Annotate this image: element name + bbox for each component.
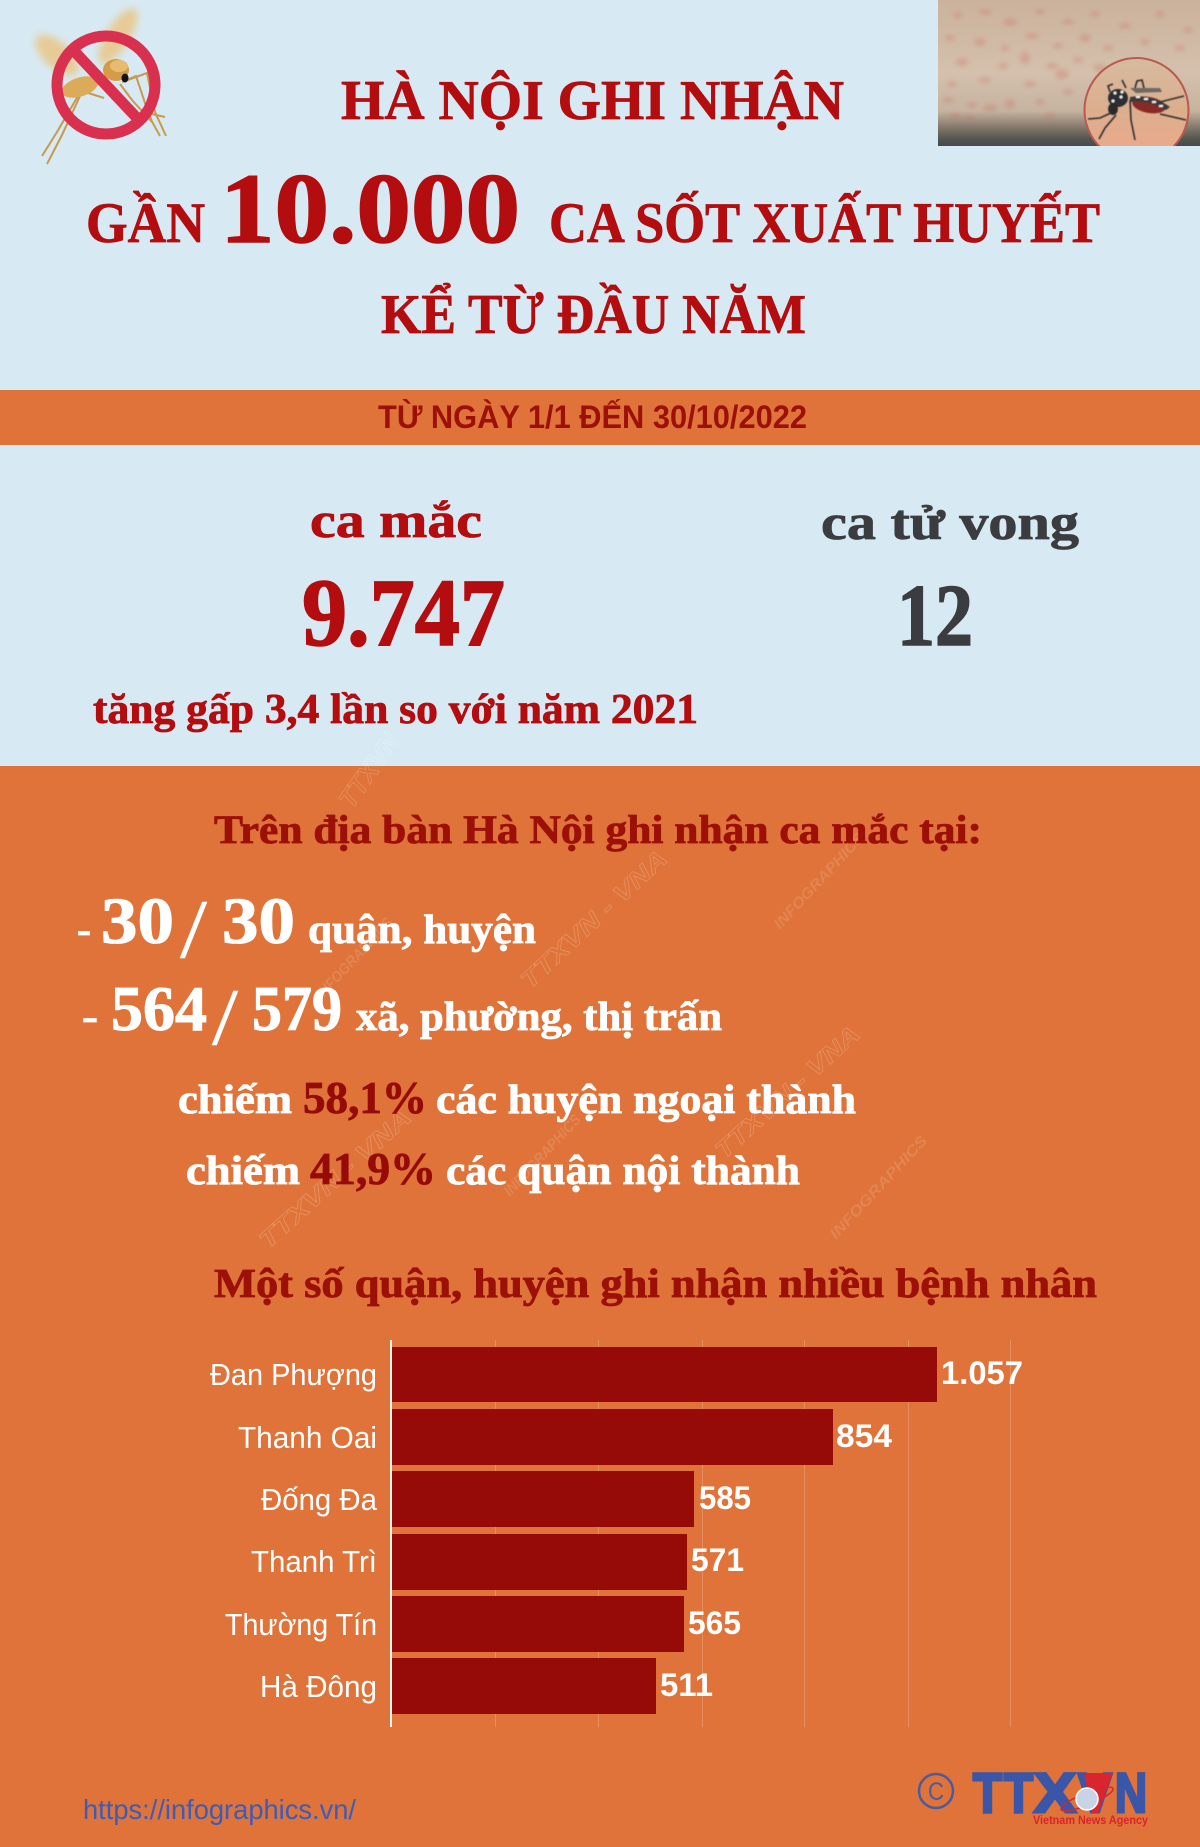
title line 3: KỂ TỪ ĐẦU NĂM [381, 282, 806, 346]
bar: Thanh Trì [251, 1534, 744, 1590]
stat line: communes: - [82, 994, 98, 1039]
logo: TTXVN: V [1078, 1761, 1112, 1824]
increase note: tăng gấp 3,4 lần so với năm 2021 [93, 687, 698, 733]
panel: orange lower section [0, 766, 1200, 1847]
stat line: suburban share: các huyện ngoại thành [436, 1076, 856, 1122]
stat line: communes: / [212, 972, 239, 1062]
bar: Hà Đông [260, 1658, 713, 1714]
stat line: districts [77, 883, 536, 976]
bar: Đống Đa: Đống Đa [261, 1482, 378, 1517]
stat line: districts: 30 [101, 885, 174, 958]
bar: Thanh Oai: 854 [836, 1418, 892, 1454]
stat line: communes: 579 [252, 974, 342, 1044]
logo: TTXVN: N [1115, 1761, 1147, 1824]
title line 2: GẦN: GẦN [86, 191, 205, 255]
stat line: urban share: 41,9% [310, 1143, 436, 1194]
watermarks: TTXVN [332, 725, 406, 813]
stat line: districts: quận, huyện [308, 906, 536, 952]
bar: Đống Đa [261, 1471, 751, 1527]
bar: Đan Phượng: Đan Phượng [210, 1357, 377, 1392]
watermarks: TTXVN - VNA [516, 845, 673, 994]
logo: TTXVN: C [928, 1778, 944, 1806]
stat line: suburban share [178, 1072, 856, 1123]
bar: Đan Phượng [210, 1347, 1023, 1402]
bar chart: districts with most patients [210, 1340, 1023, 1727]
stat value: cases: 9.747 [302, 559, 505, 666]
logo: TTXVN [919, 1761, 1149, 1827]
panel: headline statistics [93, 492, 1079, 733]
date band [0, 390, 1200, 445]
stat line: communes: 564 [111, 974, 207, 1044]
stat line: suburban share: chiếm [178, 1076, 292, 1122]
bar: Hà Đông: 511 [660, 1667, 713, 1703]
stat line: districts: - [77, 907, 91, 952]
bar: Thường Tín: 565 [688, 1605, 741, 1641]
title line 2: CA SỐT XUẤT HUYẾT: CA SỐT XUẤT HUYẾT [549, 191, 1100, 255]
bar: Thanh Oai [238, 1409, 892, 1465]
watermarks: INFOGRAPHICS [312, 914, 397, 1003]
stat line: communes: xã, phường, thị trấn [356, 993, 722, 1039]
logo: TTXVN: T [973, 1761, 1002, 1824]
title line 1: HÀ NỘI GHI NHẬN [341, 69, 844, 132]
bar: Thanh Trì: Thanh Trì [251, 1544, 377, 1579]
logo: TTXVN: Vietnam News Agency [1033, 1815, 1149, 1827]
stat line: urban share [186, 1143, 800, 1194]
chart heading: Một số quận, huyện ghi nhận nhiều bệnh nhân [214, 1260, 1097, 1306]
watermarks: TTXVN - VNA [254, 1104, 417, 1254]
source url: https://infographics.vn/ [83, 1794, 356, 1825]
logo: TTXVN: X [1034, 1761, 1076, 1824]
bar: Thường Tín: Thường Tín [225, 1607, 377, 1642]
stat line: urban share: chiếm [186, 1147, 300, 1193]
title line 2: 10.000: 10.000 [220, 153, 520, 264]
watermarks [254, 725, 931, 1254]
stat line: suburban share: 58,1% [303, 1072, 427, 1123]
bar: Thanh Oai: Thanh Oai [238, 1420, 377, 1455]
stat label: deaths: ca tử vong [821, 494, 1079, 550]
title [86, 69, 1100, 346]
bar: Hà Đông: Hà Đông [260, 1669, 377, 1704]
watermarks: INFOGRAPHICS [500, 1111, 585, 1200]
bar: Thanh Trì: 571 [691, 1542, 744, 1578]
watermarks: INFOGRAPHICS [770, 830, 868, 933]
bar: Đan Phượng: 1.057 [941, 1355, 1023, 1391]
bar: Thường Tín [225, 1596, 741, 1652]
date text: TỪ NGÀY 1/1 ĐẾN 30/10/2022 [378, 399, 807, 435]
icon: crossed-out mosquito [28, 3, 166, 164]
heading: Hanoi locations: Trên địa bàn Hà Nội ghi nhận ca mắc tại: [214, 807, 982, 852]
stat line: districts: / [180, 883, 208, 976]
watermarks: TTXVN - VNA [710, 1021, 865, 1164]
stat line: districts: 30 [222, 885, 295, 958]
stat value: deaths: 12 [897, 568, 973, 665]
watermarks: INFOGRAPHICS [826, 1132, 931, 1243]
logo: TTXVN: T [1004, 1761, 1033, 1824]
panel: top background [0, 0, 1200, 390]
stat line: communes [82, 972, 722, 1062]
stat label: cases: ca mắc [310, 492, 482, 548]
bar: Đống Đa: 585 [699, 1480, 751, 1516]
stat line: urban share: các quận nội thành [446, 1147, 800, 1193]
photo: skin rash with mosquito [938, 0, 1200, 162]
